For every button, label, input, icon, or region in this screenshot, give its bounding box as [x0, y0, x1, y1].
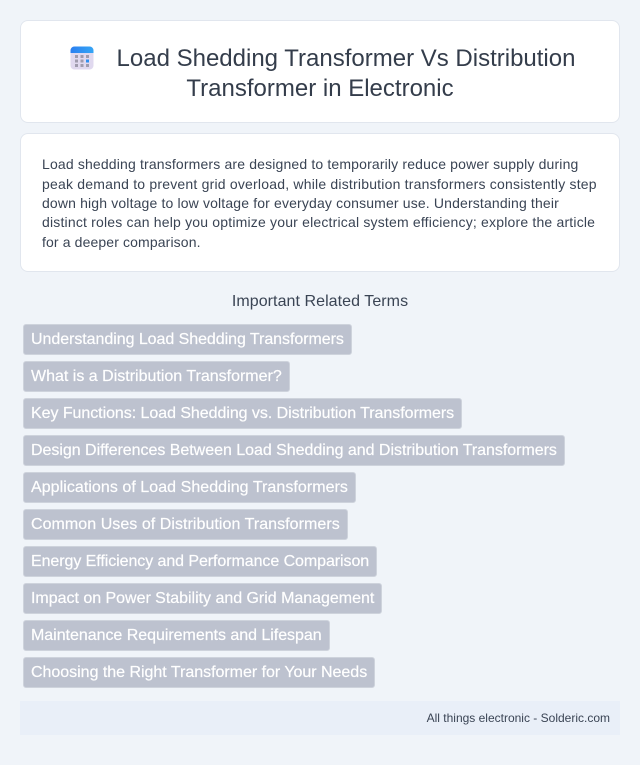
term chip 3: Key Functions: Load Shedding vs. Distribution Transformers: [31, 405, 454, 422]
term chip 9: Maintenance Requirements and Lifespan: [31, 627, 322, 644]
list of related terms: [23, 324, 565, 688]
text block: summary paragraph: Load shedding transformers are designed to temporarily reduce power supply during: [42, 156, 578, 172]
term chip 10: Choosing the Right Transformer for Your Needs: [31, 664, 367, 681]
term chip 5: [23, 472, 356, 503]
icon: calendar: [70, 46, 94, 70]
term chip 4: Design Differences Between Load Shedding and Distribution Transformers: [31, 442, 557, 459]
heading: related terms: Important Related Terms: [232, 293, 408, 310]
term chip 10: [23, 657, 375, 688]
title: [117, 45, 575, 102]
title: Load Shedding Transformer Vs Distribution: [117, 45, 575, 72]
panel: description: [20, 133, 620, 272]
text block: summary paragraph: [42, 156, 597, 250]
text block: summary paragraph: distinct roles can help you optimize your electrical system efficiency; explore the article: [42, 214, 595, 230]
term chip 5: Applications of Load Shedding Transformers: [31, 479, 348, 496]
term chip 7: [23, 546, 377, 577]
panel: title card: [20, 20, 620, 123]
term chip 1: Understanding Load Shedding Transformers: [31, 331, 344, 348]
term chip 6: Common Uses of Distribution Transformers: [31, 516, 340, 533]
term chip 2: What is a Distribution Transformer?: [31, 368, 282, 385]
term chip 8: [23, 583, 382, 614]
term chip 7: Energy Efficiency and Performance Comparison: [31, 553, 369, 570]
text block: summary paragraph: peak demand to prevent grid overload, while distribution transformers consistently step: [42, 176, 597, 192]
text block: summary paragraph: down high voltage to low voltage for everyday consumer use. Understanding their: [42, 195, 559, 211]
term chip 1: [23, 324, 352, 355]
footer bar: [20, 701, 620, 735]
text block: summary paragraph: for a deeper comparison.: [42, 234, 201, 250]
title: Transformer in Electronic: [186, 75, 454, 102]
term chip 9: [23, 620, 330, 651]
term chip 2: [23, 361, 290, 392]
term chip 8: Impact on Power Stability and Grid Management: [31, 590, 374, 607]
term chip 3: [23, 398, 462, 429]
footer credit: All things electronic - Solderic.com: [427, 711, 610, 725]
term chip 6: [23, 509, 348, 540]
term chip 4: [23, 435, 565, 466]
